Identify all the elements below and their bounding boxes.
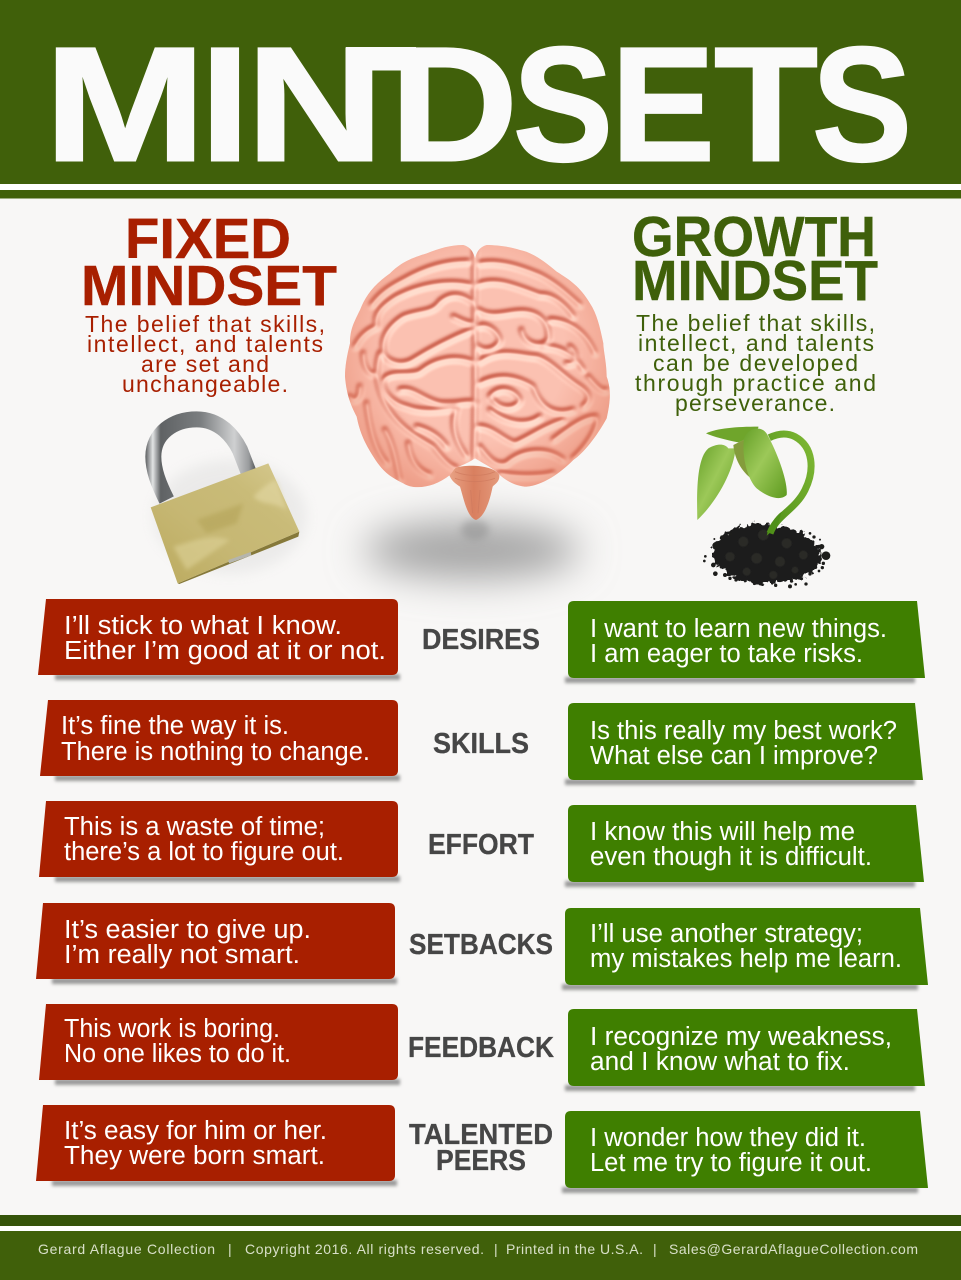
label: talented peers xyxy=(409,1119,553,1177)
growth statement: setbacks: my mistakes help me learn. xyxy=(590,945,902,973)
growth statement: feedback: I recognize my weakness, xyxy=(590,1023,892,1051)
growth statement: talented peers xyxy=(562,1111,928,1193)
label: feedback: FEEDBACK xyxy=(408,1032,554,1064)
growth mindset heading: MINDSET xyxy=(632,249,878,313)
brain floor shadow xyxy=(364,520,580,578)
fixed mindset heading: MINDSET xyxy=(81,254,337,318)
footer text: | xyxy=(653,1241,657,1257)
label: skills: SKILLS xyxy=(433,728,529,760)
fixed statement: desires: Either I’m good at it or not. xyxy=(64,637,386,665)
title: E xyxy=(611,12,715,196)
icon: padlock xyxy=(151,419,307,584)
growth statement: talented peers: Let me try to figure it out. xyxy=(590,1149,872,1177)
fixed statement: skills: It’s fine the way it is. xyxy=(61,712,289,740)
growth mindset description xyxy=(635,310,876,416)
row: feedback xyxy=(39,1004,925,1091)
fixed statement: skills xyxy=(40,700,400,781)
growth mindset heading: GROWTH xyxy=(632,205,876,269)
footer text: Sales@GerardAflagueCollection.com xyxy=(669,1241,918,1257)
fixed statement: setbacks xyxy=(36,903,397,984)
fixed statement: feedback xyxy=(39,1004,400,1085)
growth mindset description: perseverance. xyxy=(675,390,835,416)
fixed statement: skills: There is nothing to change. xyxy=(61,738,370,766)
fixed statement: setbacks: I’m really not smart. xyxy=(64,941,300,969)
growth statement: setbacks xyxy=(562,908,928,990)
fixed mindset heading xyxy=(81,207,337,318)
title: I xyxy=(200,12,250,196)
growth mindset description: The belief that skills, xyxy=(636,310,875,336)
fixed mindset description xyxy=(85,311,325,397)
fixed mindset description: intellect, and talents xyxy=(87,331,323,357)
growth statement: feedback xyxy=(565,1009,925,1091)
row: talented peers xyxy=(36,1105,928,1193)
title: D xyxy=(390,12,518,196)
fixed statement: effort: there’s a lot to figure out. xyxy=(64,838,344,866)
label: talented peers: PEERS xyxy=(436,1145,526,1177)
fixed statement: talented peers xyxy=(36,1105,397,1186)
fixed mindset description: unchangeable. xyxy=(122,371,288,397)
growth statement: talented peers: I wonder how they did it. xyxy=(590,1124,866,1152)
label: desires: DESIRES xyxy=(422,624,540,656)
title: N xyxy=(246,12,384,196)
fixed statement: setbacks: It’s easier to give up. xyxy=(64,916,311,944)
title: S xyxy=(513,12,613,196)
growth statement: feedback: and I know what to fix. xyxy=(590,1048,850,1076)
footer band xyxy=(0,1215,961,1280)
label: setbacks: SETBACKS xyxy=(409,929,553,961)
label: talented peers: TALENTED xyxy=(409,1119,553,1151)
row: effort xyxy=(39,801,924,887)
footer text: | xyxy=(228,1241,232,1257)
fixed statement: effort xyxy=(39,801,400,882)
fixed statement: feedback: This work is boring. xyxy=(64,1015,280,1043)
growth statement: effort: I know this will help me xyxy=(590,818,855,846)
fixed mindset heading: FIXED xyxy=(125,207,291,271)
fixed mindset description: The belief that skills, xyxy=(85,311,325,337)
fixed statement: effort: This is a waste of time; xyxy=(64,813,325,841)
footer text: Copyright 2016. All rights reserved. xyxy=(245,1241,484,1257)
growth statement: desires xyxy=(565,601,925,683)
fixed statement: talented peers: They were born smart. xyxy=(64,1142,325,1170)
icon: brain xyxy=(345,245,610,520)
footer text: | xyxy=(494,1241,498,1257)
growth statement: skills: Is this really my best work? xyxy=(590,717,897,745)
fixed statement: feedback: No one likes to do it. xyxy=(64,1040,291,1068)
row: skills xyxy=(40,700,923,785)
fixed statement: desires xyxy=(38,599,400,680)
growth statement: skills: What else can I improve? xyxy=(590,742,878,770)
fixed mindset description: are set and xyxy=(141,351,269,377)
growth mindset description: can be developed xyxy=(653,350,858,376)
footer text: Printed in the U.S.A. xyxy=(506,1241,643,1257)
fixed statement: desires: I’ll stick to what I know. xyxy=(64,612,342,640)
growth mindset description: through practice and xyxy=(635,370,876,396)
growth statement: effort xyxy=(565,805,924,887)
footer text: Gerard Aflague Collection xyxy=(38,1241,215,1257)
growth statement: desires: I am eager to take risks. xyxy=(590,640,863,668)
title xyxy=(44,12,912,196)
title: S xyxy=(812,12,912,196)
title: T xyxy=(714,12,818,196)
growth statement: effort: even though it is difficult. xyxy=(590,843,872,871)
growth mindset heading xyxy=(632,205,878,313)
growth statement: desires: I want to learn new things. xyxy=(590,615,887,643)
header band xyxy=(0,0,961,198)
growth statement: skills xyxy=(565,703,923,785)
icon: seedling in soil xyxy=(697,427,830,588)
row: desires xyxy=(38,599,925,683)
growth mindset description: intellect, and talents xyxy=(638,330,874,356)
label: effort: EFFORT xyxy=(428,829,534,861)
footer text xyxy=(38,1241,918,1257)
row: setbacks xyxy=(36,903,928,990)
growth statement: setbacks: I’ll use another strategy; xyxy=(590,920,863,948)
fixed statement: talented peers: It’s easy for him or her. xyxy=(64,1117,327,1145)
title: M xyxy=(44,12,206,196)
